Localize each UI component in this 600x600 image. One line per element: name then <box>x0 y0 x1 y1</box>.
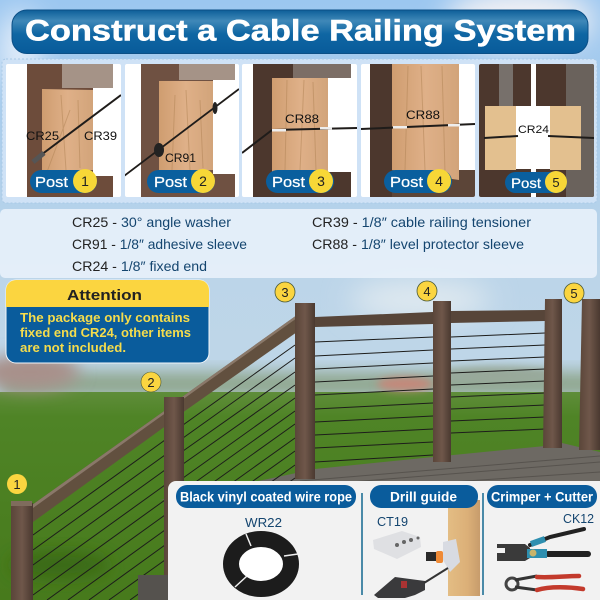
posts <box>11 299 600 600</box>
icon: hydraulic crimper <box>497 529 591 561</box>
callout: attention <box>6 280 209 363</box>
deck <box>160 443 600 500</box>
attention heading: Attention <box>67 287 142 304</box>
legend CR39: CR39 - 1/8″ cable railing tensioner <box>312 214 531 230</box>
marker 2 <box>141 372 161 392</box>
post 1 badge: Post <box>35 174 69 191</box>
post 5 badge: Post <box>511 175 541 191</box>
icon: wood post <box>448 500 480 596</box>
label CR39: CR39 <box>84 131 117 143</box>
attention text: are not included. <box>20 341 126 355</box>
post 2 badge <box>147 169 215 193</box>
attention text: The package only contains <box>20 311 190 325</box>
label CR91: CR91 <box>165 153 196 165</box>
product: drill guide: CT19 <box>377 514 408 529</box>
product: wire rope <box>176 485 356 589</box>
icon: drill jig <box>373 531 460 572</box>
handrails <box>32 310 600 522</box>
legend CR25: CR25 - 30° angle washer <box>72 214 231 230</box>
icon: drill <box>374 568 448 598</box>
icon: cable cutter <box>506 576 583 590</box>
label CR88: CR88 <box>285 114 319 126</box>
marker 1 <box>7 474 27 494</box>
attention text <box>20 311 191 355</box>
label CR25: CR25 <box>26 131 59 143</box>
post 3 badge <box>266 169 334 193</box>
product: drill guide <box>370 485 480 598</box>
marker 5 <box>564 283 584 303</box>
drill guide heading: Drill guide <box>390 490 457 504</box>
marker 1: 1 <box>13 477 21 492</box>
post 5 badge: 5 <box>552 175 560 190</box>
cables <box>33 333 545 600</box>
post 1 badge <box>30 169 97 193</box>
post 3 badge: Post <box>272 174 306 191</box>
panel: part legend <box>0 209 597 278</box>
panel: installation photos <box>2 59 597 203</box>
legend CR88: CR88 - 1/8″ level protector sleeve <box>312 236 524 252</box>
card: post 4 <box>361 64 475 197</box>
marker 5: 5 <box>570 286 578 301</box>
card: post 5 <box>479 64 594 197</box>
product: crimper and cutter: Crimper + Cutter <box>491 490 594 504</box>
card: post 1 <box>6 64 121 197</box>
post 2 badge: 2 <box>199 173 207 189</box>
post 1 badge: 1 <box>81 173 89 189</box>
attention text: fixed end CR24, other items <box>20 326 191 340</box>
icon: wire coil <box>231 534 298 589</box>
post 4 badge: Post <box>390 174 424 191</box>
legend CR24: CR24 - 1/8″ fixed end <box>72 258 207 274</box>
marker 3 <box>275 282 295 302</box>
card: post 3 <box>242 64 357 197</box>
product: crimper and cutter <box>487 485 597 590</box>
title banner <box>12 10 588 54</box>
post 4 badge: 4 <box>435 173 443 189</box>
marker 4: 4 <box>423 284 431 299</box>
legend CR91: CR91 - 1/8″ adhesive sleeve <box>72 236 247 252</box>
title: Construct a Cable Railing System <box>25 14 576 48</box>
block at post base <box>138 575 168 600</box>
card: post 2 <box>124 64 239 197</box>
railing with posts and cables <box>11 299 600 600</box>
product: crimper and cutter: CK12 <box>563 511 594 526</box>
marker 2: 2 <box>147 375 155 390</box>
post 4 badge <box>384 169 452 193</box>
product: wire rope: WR22 <box>245 515 282 530</box>
product: wire rope: Black vinyl coated wire rope <box>180 490 352 504</box>
marker 3: 3 <box>281 285 289 300</box>
panel: required tools <box>168 481 600 600</box>
label CR24: CR24 <box>518 124 549 136</box>
post 2 badge: Post <box>154 174 188 191</box>
post 5 badge <box>505 171 567 193</box>
label CR88: CR88 <box>406 110 440 122</box>
marker 4 <box>417 281 437 301</box>
post 3 badge: 3 <box>317 173 325 189</box>
